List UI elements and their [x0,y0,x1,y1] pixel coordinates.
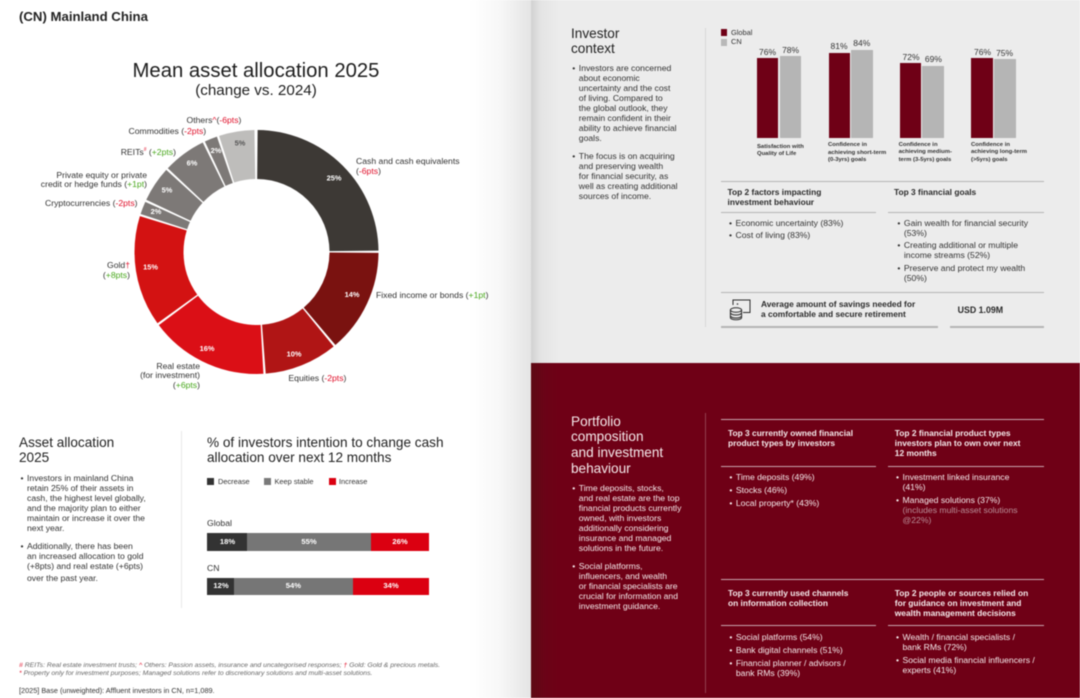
bullet: investor context 1: of living. Compared to [579,93,663,103]
bar chart: medium-term confidence: achieving medium- [899,149,952,155]
bullet: portfolio 1: owned, with investors [579,513,661,523]
bullet: investor context 2: sources of income. [579,191,651,201]
heading: top 3 financial goals: Top 3 financial goals [894,187,976,197]
label: private equity [40,170,148,190]
bullet: asset allocation 2: (+8pts) and real estate (+6pts) [27,561,143,571]
stacked bar: CN: 12% [213,581,229,590]
bar chart: satisfaction with quality of life: Quality of Life [757,151,796,157]
callout: retirement savings text: a comfortable and secure retirement [761,309,906,319]
bullet: asset allocation 2 [27,541,144,581]
bullet: portfolio 2: Social platforms, [579,561,643,571]
bar chart: long-term confidence: achieving long-term [971,149,1027,155]
bar chart: satisfaction with quality of life [756,45,804,157]
region title: (CN) Mainland China [19,9,148,24]
bullet: portfolio 2: influencers, and wealth [579,571,667,581]
bullet: portfolio 2: crucial for information and [579,591,678,601]
bullet: asset allocation 1: cash, the highest level globally, [27,493,146,503]
callout: retirement savings value: USD 1.09M [958,305,1003,315]
heading: asset allocation [18,435,114,465]
bullet: portfolio 2: or financial specialists are [579,581,678,591]
list: factors: Cost of living (83%) [736,230,810,240]
donut chart: 25% [327,174,342,183]
label: global: Global [207,518,232,528]
heading: planned products [894,428,1021,458]
bar chart: long-term confidence: 76% [974,47,991,57]
chart subtitle: (change vs. 2024) [195,82,317,99]
label: REITs: REITs# (+2pts) [121,146,176,156]
footnotes [18,662,440,678]
bar chart: short-term confidence [828,38,887,163]
bullet: asset allocation 2: over the past year. [27,573,98,583]
heading: top 2 factors [727,187,822,207]
list: financial goals: (50%) [904,273,927,283]
label: real estate [140,361,200,390]
bar chart: medium-term confidence: Confidence in [899,142,938,148]
bullet: investor context 2 [579,151,678,201]
bar chart: long-term confidence: Confidence in [971,142,1010,148]
heading: investor context: context [571,41,615,56]
heading: portfolio composition: composition [571,429,644,444]
heading: cash intention chart [206,434,444,465]
legend: bar chart: Global [731,28,752,37]
heading: planned products: 12 months [895,448,937,458]
list: owned products: Local property* (43%) [736,498,819,508]
bullet: investor context 1: about economic [579,73,640,83]
donut chart: 5% [235,139,246,148]
bullet: investor context 1: goals. [579,133,602,143]
bullet: asset allocation 1: maintain or increase it over the [27,513,145,523]
bullet: asset allocation 1: and the majority plan to either [27,503,141,513]
list: guidance sources [896,632,1036,676]
heading: investor context: Investor [571,26,619,40]
label: private equity: Private equity or private [56,170,147,180]
donut chart: 16% [200,344,215,353]
heading: guidance sources: Top 2 people or sources relied on [895,588,1028,598]
list: planned products: (includes multi-asset solutions [902,505,1018,515]
list: factors: Economic uncertainty (83%) [736,218,843,228]
donut chart: 15% [143,262,158,271]
bar chart: short-term confidence: Confidence in [828,142,867,148]
heading: owned products [727,428,854,448]
heading: portfolio composition: Portfolio [571,414,621,428]
heading: information channels: on information collection [728,598,828,608]
label: private equity: credit or hedge funds (+1pt) [41,179,147,189]
bar chart: satisfaction with quality of life: 78% [782,45,799,55]
bullet: investor context 1: Investors are concerned [579,63,671,73]
list: financial goals: Gain wealth for financial security [904,218,1028,228]
bar chart: satisfaction with quality of life: Satisfaction with [757,144,804,150]
legend: cash intention: Keep stable [274,476,314,486]
bar chart: medium-term confidence [898,52,952,163]
callout: retirement savings text: Average amount of savings needed for [761,299,915,309]
bullet: portfolio 1 [579,483,681,553]
list: guidance sources: Wealth / financial specialists / [902,632,1015,642]
heading: cash intention chart: allocation over next 12 months [207,450,391,465]
bullet: portfolio 1: financial products currently [579,503,681,513]
heading: guidance sources: wealth management decisions [895,608,1016,618]
list: financial goals: (53%) [904,228,927,238]
bullet: asset allocation 1 [27,473,146,533]
bar chart: short-term confidence: 84% [853,38,870,48]
label: gold [102,260,130,280]
bar chart: medium-term confidence: term (3-5yrs) goals [899,156,951,162]
legend: cash intention [206,476,368,486]
legend: cash intention: Decrease [218,476,250,486]
icon: savings coins [729,298,752,321]
label: real estate: Real estate [156,361,200,371]
bullet: investor context 2: well as creating additional [579,181,678,191]
donut chart: 10% [287,350,302,359]
heading: cash intention chart: % of investors intention to change cash [207,434,444,450]
bullet: portfolio 1: and real estate are the top [579,493,680,503]
donut chart [134,129,380,375]
stacked bar: global: 18% [220,536,235,546]
bullet: asset allocation 1: Investors in mainland China [27,473,133,483]
stacked bar: CN [206,577,430,596]
heading: owned products: product types by investors [728,438,835,448]
stacked bar: global: 55% [301,536,317,546]
bar chart: long-term confidence: 75% [996,48,1013,58]
label: real estate: (for investment) [140,370,200,380]
stacked bar: global [206,532,430,552]
label: gold: (+8pts) [103,270,130,280]
heading: planned products: Top 2 financial product types [895,428,1011,438]
donut chart: 2% [211,146,222,155]
panel: portfolio composition background [531,363,1080,698]
list: planned products: @22%) [902,515,931,525]
bullet: investor context 1: remain confident in their [579,113,671,123]
bar chart: short-term confidence: (0-3yrs) goals [828,157,866,163]
base note: [2025] Base (unweighted): Affluent investors in CN, n=1,089. [19,686,215,695]
footnotes: * Property only for investment purposes; Managed solutions refer to discretionary solutions and multi-asset solutions. [19,670,372,677]
list: information channels: bank RMs (39%) [736,668,800,678]
bar chart: long-term confidence [970,47,1028,163]
heading: asset allocation: 2025 [19,450,49,465]
label: CN: CN [207,563,219,573]
heading: planned products: investors plan to own over next [895,438,1020,448]
list: information channels: Social platforms (54%) [736,632,823,642]
list: planned products [896,472,1018,525]
list: financial goals: income streams (52%) [904,250,990,260]
heading: information channels: Top 3 currently used channels [728,588,848,598]
list: planned products: Managed solutions (37%) [902,495,1000,505]
stacked bar: CN: 34% [383,581,399,590]
list: information channels: Bank digital channels (51%) [736,645,843,655]
bullet: asset allocation 2: an increased allocation to gold [27,551,144,561]
heading: top 2 factors: Top 2 factors impacting [728,187,821,197]
footnotes: # REITs: Real estate investment trusts; ^ Others: Passion assets, insurance and uncategorised responses; † Gold: Gold & precious metals. [19,662,440,668]
label: cryptocurrencies: Cryptocurrencies (-2pts) [45,198,138,208]
donut chart: 5% [162,186,173,195]
bullet: portfolio 1: additionally considering [579,523,668,533]
bar chart: medium-term confidence: 72% [902,52,920,62]
bullet: portfolio 2 [579,561,678,611]
list: owned products: Stocks (46%) [736,485,787,495]
label: gold: Gold† [107,260,130,270]
heading: information channels [727,588,849,608]
bullet: portfolio 2: investment guidance. [579,601,660,611]
donut chart: 14% [345,290,360,299]
list: owned products [729,472,820,508]
heading: portfolio composition: behaviour [571,461,631,476]
list: factors [728,218,844,240]
heading: owned products: Top 3 currently owned financial [728,428,853,438]
list: guidance sources: experts (41%) [902,665,956,675]
list: guidance sources: Social media financial influencers / [902,655,1035,665]
list: financial goals: Preserve and protect my wealth [904,263,1025,273]
bar chart: satisfaction with quality of life: 76% [759,47,776,57]
bullet: investor context 2: The focus is on acquiring [579,151,675,161]
bullet: asset allocation 1: next year. [27,523,64,533]
list: planned products: Investment linked insurance [902,472,1009,482]
bullet: investor context 2: and preserving wealth [579,161,663,171]
label: commodities: Commodities (-2pts) [128,126,206,136]
heading: guidance sources [894,588,1029,618]
heading: portfolio composition [570,414,664,476]
list: financial goals [897,218,1028,283]
bar chart: long-term confidence: (>5yrs) goals [971,156,1008,162]
bar chart: short-term confidence: achieving short-term [828,150,886,156]
label: cash [356,156,460,176]
label: cash: (-6pts) [356,166,381,176]
list: guidance sources: bank RMs (72%) [902,642,967,652]
bullet: investor context 1: uncertainty and the cost [579,83,670,93]
list: planned products: (41%) [902,482,926,492]
heading: asset allocation: Asset allocation [19,435,114,450]
bullet: investor context 1: ability to achieve financial [579,123,677,133]
list: owned products: Time deposits (49%) [736,472,815,482]
list: financial goals: Creating additional or multiple [904,240,1018,250]
bullet: investor context 1 [579,63,677,143]
list: information channels: Financial planner / advisors / [736,658,846,668]
heading: top 2 factors: investment behaviour [728,197,814,207]
bullet: asset allocation 1: retain 25% of their assets in [27,483,133,493]
donut chart: 2% [151,207,162,216]
page shadow gradient [470,0,531,698]
bar chart: medium-term confidence: 69% [925,54,942,64]
bar chart: short-term confidence: 81% [830,41,848,51]
legend: bar chart [720,28,753,46]
bullet: portfolio 1: Time deposits, stocks, [579,483,664,493]
callout: retirement savings text [760,299,916,319]
heading: investor context [570,26,620,56]
chart title: Mean asset allocation 2025 [133,60,379,82]
label: fixed income: Fixed income or bonds (+1pt) [376,290,488,300]
legend: bar chart: CN [731,37,742,46]
label: real estate: (+6pts) [173,380,200,390]
list: information channels [729,632,846,678]
panel: investor context background [531,0,1080,363]
bullet: investor context 2: for financial security, as [579,171,668,181]
label: equities: Equities (-2pts) [288,373,346,383]
donut chart: 6% [187,159,198,168]
label: cash: Cash and cash equivalents [356,156,460,166]
label: others: Others^(-6pts) [186,115,241,125]
heading: portfolio composition: and investment [571,445,663,460]
heading: guidance sources: for guidance on investment and [895,598,1021,608]
legend: cash intention: Increase [339,476,367,486]
stacked bar: CN: 54% [286,581,301,590]
stacked bar: global: 26% [392,536,408,546]
bullet: portfolio 1: solutions in the future. [579,543,663,553]
bullet: asset allocation 2: Additionally, there has been [27,541,133,551]
bullet: portfolio 1: insurance and managed [579,533,671,543]
bullet: investor context 1: the global outlook, they [579,103,668,113]
